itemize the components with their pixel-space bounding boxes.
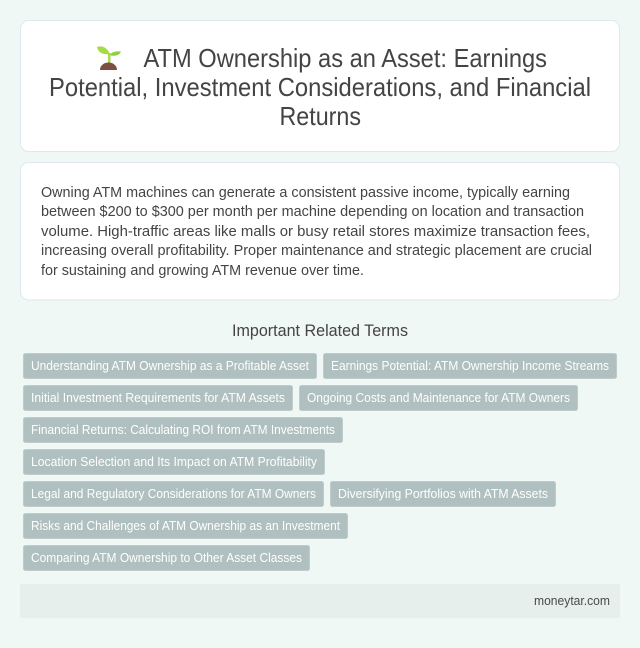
title text	[49, 43, 591, 131]
chip: Ongoing Costs and Maintenance for ATM Owners	[307, 391, 570, 405]
chip	[24, 418, 342, 442]
chip: Legal and Regulatory Considerations for ATM Owners	[31, 487, 316, 501]
chip: Financial Returns: Calculating ROI from ATM Investments	[31, 423, 335, 437]
description text: increasing overall profitability. Proper maintenance and strategic placement are crucial	[41, 242, 592, 259]
title text: Potential, Investment Considerations, and Financial	[49, 72, 591, 102]
footer bar	[20, 584, 620, 618]
chip	[24, 546, 310, 570]
panel: title card	[20, 20, 620, 152]
heading: important related terms: Important Related Terms	[232, 322, 408, 340]
chip	[330, 482, 556, 506]
description text: Owning ATM machines can generate a consistent passive income, typically earning	[41, 184, 570, 201]
chip	[24, 386, 292, 410]
chip: Diversifying Portfolios with ATM Assets	[338, 487, 548, 501]
chip: Initial Investment Requirements for ATM Assets	[31, 391, 285, 405]
chip	[24, 482, 324, 506]
description text	[41, 184, 592, 279]
description text: for sustaining and growing ATM revenue over time.	[41, 262, 364, 279]
chip	[24, 514, 348, 538]
chip: Location Selection and Its Impact on ATM Profitability	[31, 455, 318, 469]
panel: related term chips	[24, 354, 616, 570]
chip	[24, 450, 324, 474]
chip	[324, 354, 616, 378]
icon: sprout	[97, 46, 121, 70]
chip: Comparing ATM Ownership to Other Asset Classes	[31, 551, 302, 565]
panel: description card	[20, 162, 620, 300]
title text: ATM Ownership as an Asset: Earnings	[144, 43, 547, 73]
description text: between $200 to $300 per month per machine depending on location and transaction	[41, 203, 584, 220]
chip	[24, 354, 316, 378]
chip	[300, 386, 578, 410]
title text: Returns	[280, 101, 361, 131]
description text: volume. High-traffic areas like malls or busy retail stores maximize transaction fees,	[41, 223, 590, 240]
chip: Risks and Challenges of ATM Ownership as an Investment	[31, 519, 341, 533]
chip: Earnings Potential: ATM Ownership Income Streams	[331, 359, 609, 373]
footer source: moneytar.com	[534, 593, 610, 608]
chip: Understanding ATM Ownership as a Profitable Asset	[31, 359, 309, 373]
